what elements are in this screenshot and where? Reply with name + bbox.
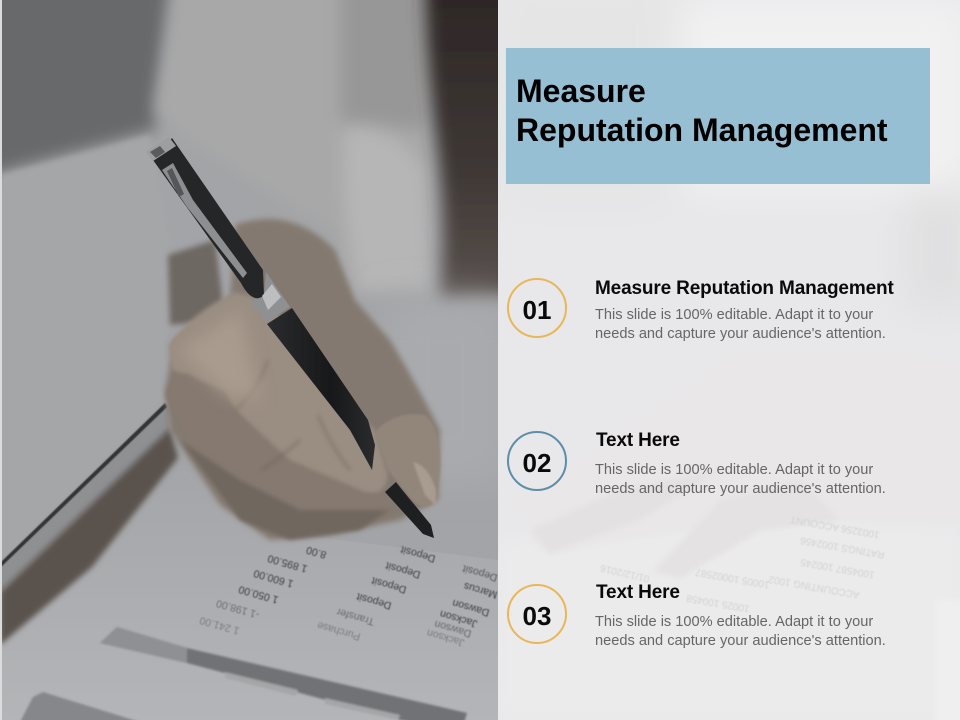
paper table text: Jackson bbox=[425, 626, 466, 649]
shirt bbox=[155, 0, 432, 300]
notebook edge and shadow bbox=[0, 403, 170, 592]
pen bbox=[146, 137, 434, 538]
paper table text: 8.00 bbox=[305, 543, 328, 561]
paper table text: Deposit bbox=[384, 559, 422, 581]
desk and notebook bbox=[2, 135, 148, 182]
paper table text: Deposit bbox=[355, 590, 393, 612]
paper table text: 1 600.00 bbox=[252, 567, 295, 590]
background wall bbox=[0, 0, 170, 178]
item 2 heading: Text Here bbox=[596, 430, 680, 451]
item 3 text: This slide is 100% editable. Adapt it to your bbox=[595, 614, 873, 630]
middle finger bbox=[164, 390, 371, 496]
faded paper bbox=[498, 515, 960, 720]
paper table text: Deposit bbox=[370, 574, 408, 596]
faded hand bbox=[510, 345, 960, 575]
item 3 text bbox=[595, 614, 886, 648]
knuckle creases bbox=[236, 360, 350, 470]
faded shirt and hair bbox=[706, 24, 954, 283]
paper table text: Purchase bbox=[316, 619, 362, 643]
paper table text: 1 050.00 bbox=[237, 583, 280, 606]
dark hair bbox=[425, 0, 520, 300]
item 1 heading: Measure Reputation Management bbox=[595, 278, 894, 299]
paper table text: -1 198.00 bbox=[215, 597, 261, 621]
paper table text bbox=[198, 543, 499, 649]
pen nib bbox=[385, 482, 434, 538]
title bbox=[516, 73, 888, 148]
item 2 text bbox=[595, 462, 886, 496]
paper table text: 1 895.00 bbox=[266, 552, 309, 575]
paper table text: Dawson bbox=[451, 597, 491, 619]
faded paper text: 10005 10002587 bbox=[694, 566, 771, 590]
paper table text: Jackson bbox=[438, 607, 479, 630]
paper table text: Dawson bbox=[433, 618, 473, 640]
left photo: hand writing with a pen bbox=[0, 0, 520, 720]
faded paper text: ACCOUNTING 1002 bbox=[767, 573, 861, 600]
index finger bbox=[168, 292, 388, 495]
paper table text: Marcus bbox=[462, 580, 499, 601]
title banner bbox=[506, 48, 930, 184]
paper header bars bbox=[20, 627, 467, 720]
pen barrel upper bbox=[153, 138, 264, 298]
thumb bbox=[375, 414, 440, 507]
pen barrel lower bbox=[267, 308, 375, 470]
palm highlight bbox=[188, 318, 260, 401]
item 2 text: This slide is 100% editable. Adapt it to your bbox=[595, 462, 873, 478]
faded paper text: 01/12/2016 bbox=[599, 562, 651, 584]
pen cap tip bbox=[147, 139, 176, 161]
pen clip bbox=[162, 163, 247, 278]
faded paper text: RATINGS 1002456 bbox=[799, 534, 886, 560]
paper table text: Deposit bbox=[461, 562, 499, 584]
number circle 02: 02 bbox=[523, 448, 551, 478]
faded paper text bbox=[599, 513, 886, 614]
paper sheet bbox=[2, 578, 498, 720]
number circle 01 bbox=[507, 278, 567, 338]
paper table text: 1 241.00 bbox=[198, 614, 241, 637]
number circle 03: 03 bbox=[523, 601, 551, 631]
number circle 01: 01 bbox=[523, 295, 551, 325]
faded paper text: 1004587 100245 bbox=[799, 556, 876, 580]
light strip at left edge bbox=[0, 0, 2, 720]
item 1 text bbox=[595, 307, 886, 342]
pen silver ring bbox=[250, 272, 290, 322]
faded paper text: 1003256 ACCOUNT bbox=[789, 513, 881, 540]
item 2 text: needs and capture your audience's attention. bbox=[595, 480, 886, 496]
item 3 text: needs and capture your audience's attention. bbox=[595, 632, 886, 648]
title: Measure bbox=[516, 73, 646, 109]
right photo: faded hand on paper bbox=[601, 24, 954, 612]
number circle 02 bbox=[507, 431, 567, 491]
wrist shadow bbox=[168, 240, 225, 325]
hand bbox=[165, 219, 440, 540]
paper table text: Deposit bbox=[399, 543, 437, 565]
paper table text: Transfer bbox=[335, 605, 376, 628]
item 3 heading: Text Here bbox=[596, 582, 680, 603]
item 1 text: needs and capture your audience's attention. bbox=[595, 326, 886, 342]
number circle 03 bbox=[507, 584, 567, 644]
faded paper text: 10025 100458 bbox=[685, 592, 751, 614]
ring finger shade bbox=[180, 440, 390, 540]
item 1 text: This slide is 100% editable. Adapt it to your bbox=[595, 307, 873, 323]
title: Reputation Management bbox=[516, 112, 888, 148]
